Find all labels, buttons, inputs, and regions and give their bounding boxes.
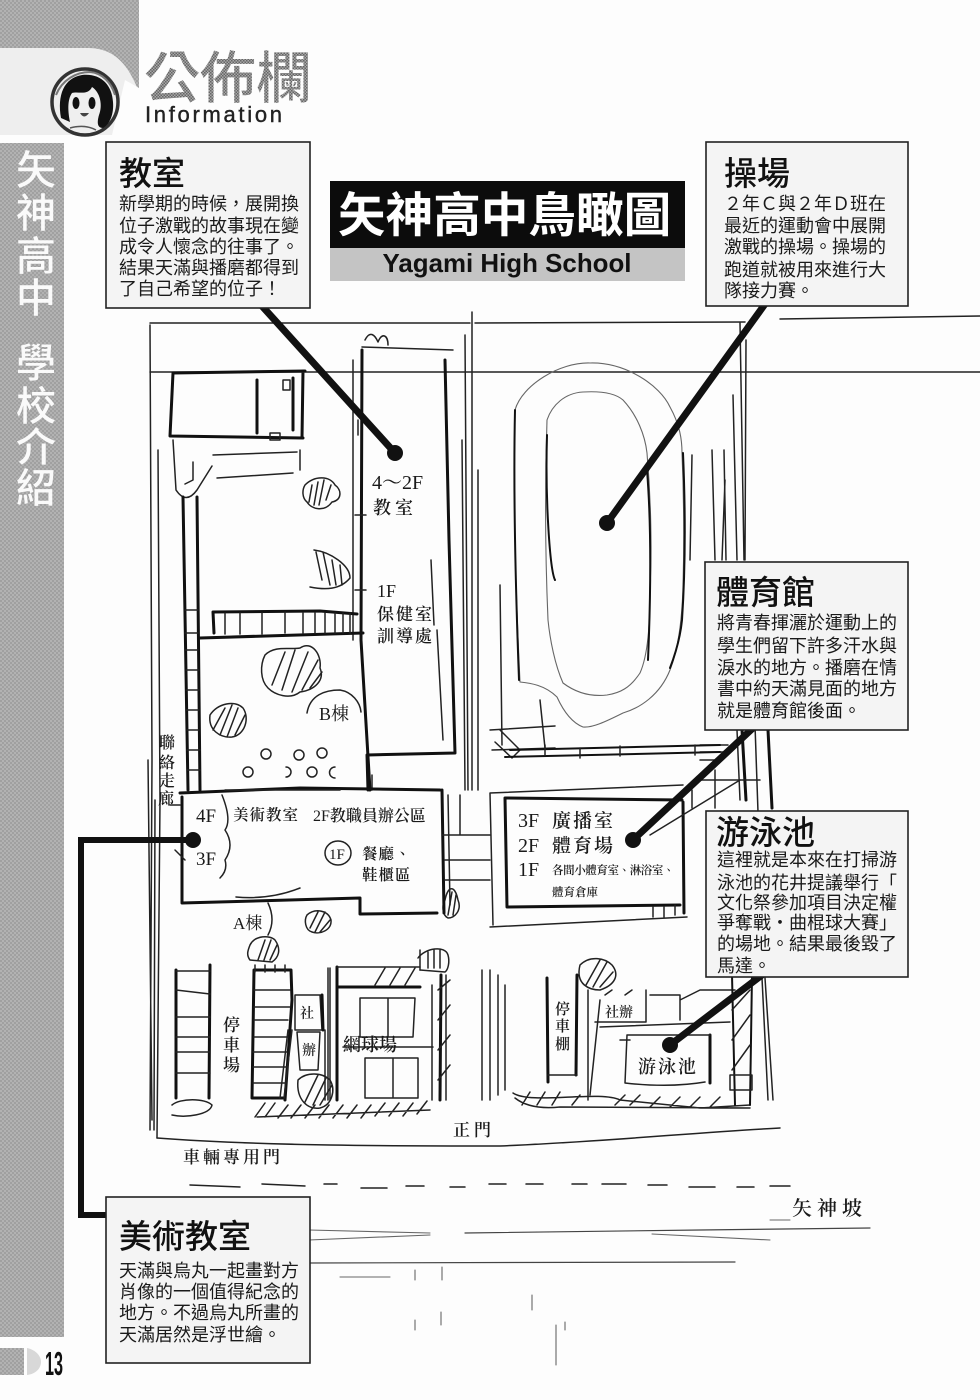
map labels: 2F xyxy=(518,835,539,857)
map labels: 3F xyxy=(518,810,539,832)
carport and pool xyxy=(547,975,752,1105)
leader lines xyxy=(81,304,765,1215)
panel: 美術教室: 天滿與烏丸一起畫對方 xyxy=(119,1257,299,1283)
leader: pool xyxy=(662,975,762,1053)
panel: 操場: 操場 xyxy=(724,155,790,192)
panel: 教室: 了自己希望的位子！ xyxy=(119,275,281,301)
sidebar vertical title: 紹 xyxy=(16,467,56,511)
corridor ladder xyxy=(183,497,200,790)
leader: gym xyxy=(625,728,753,848)
panel: 操場: 跑道就被用來進行大 xyxy=(724,256,886,282)
panel: 游泳池 xyxy=(706,811,908,978)
map labels: 場 xyxy=(223,1056,240,1075)
title block: 矢神高中鳥瞰圖 xyxy=(338,190,671,243)
site boundary lines xyxy=(148,312,980,1146)
panel: 體育館: 學生們留下許多汗水與 xyxy=(717,632,897,658)
sidebar vertical title: 神 xyxy=(16,192,56,236)
heading: 公佈欄 Information: Information xyxy=(145,102,282,127)
map labels: 廣播室 xyxy=(552,810,615,832)
sidebar band xyxy=(0,143,64,1337)
panel: 體育館: 淚水的地方。播磨在情 xyxy=(717,654,897,680)
title block: Yagami High School xyxy=(382,248,632,278)
map labels: 車 xyxy=(555,1017,570,1035)
tennis court xyxy=(330,950,450,1100)
map labels: 廊 xyxy=(158,790,174,808)
building B xyxy=(353,334,455,790)
sidebar vertical title: 中 xyxy=(16,277,56,321)
title block xyxy=(330,181,685,281)
panel: 美術教室: 肖像的一個值得紀念的 xyxy=(119,1278,299,1304)
map labels: 4～2F xyxy=(372,472,423,494)
panel: 教室: 位子激戰的故事現在變 xyxy=(119,212,299,238)
panel: 體育館: 體育館 xyxy=(716,574,815,611)
club rooms xyxy=(295,968,328,1100)
map labels: 各間小體育室、淋浴室、 xyxy=(552,863,674,877)
panel: 教室: 結果天滿與播磨都得到 xyxy=(119,254,299,280)
map labels: 棚 xyxy=(555,1035,570,1053)
service building xyxy=(170,371,305,498)
bottom hedges xyxy=(255,970,750,1118)
map labels: B棟 xyxy=(319,704,349,724)
map labels: 鞋櫃區 xyxy=(362,865,412,884)
panel: 美術教室: 地方。不過烏丸所畫的 xyxy=(119,1299,299,1325)
leader: classroom xyxy=(262,306,403,461)
sidebar vertical title: 介 xyxy=(16,426,56,470)
map labels xyxy=(158,472,698,1167)
map labels: 停 xyxy=(555,1000,570,1018)
map labels: A棟 xyxy=(233,914,262,933)
map labels: 訓導處 xyxy=(377,626,434,646)
building A outline xyxy=(170,788,490,935)
sidebar vertical title: 校 xyxy=(16,385,56,429)
map labels: 1F xyxy=(518,859,539,881)
panel: 體育館 xyxy=(705,562,908,730)
track xyxy=(490,363,725,758)
text: 13 xyxy=(45,1345,63,1382)
map labels: 保健室 xyxy=(377,605,434,624)
heading: 公佈欄 Information: 公佈欄 xyxy=(144,47,312,110)
page number tab xyxy=(0,1345,63,1382)
leader: art room xyxy=(81,832,201,1215)
road markings: 矢神坡 xyxy=(792,1197,867,1220)
map labels: 1F xyxy=(377,581,396,601)
panel: 操場: 激戰的操場。操場的 xyxy=(724,233,886,259)
road markings xyxy=(190,1184,870,1365)
leader: sports field xyxy=(599,304,765,531)
map labels: 走 xyxy=(159,772,175,790)
map labels: 網球場 xyxy=(343,1035,397,1055)
trees xyxy=(210,478,616,1108)
map labels: 停 xyxy=(223,1016,240,1035)
map labels: 餐廳、 xyxy=(362,844,412,863)
panel: 體育館: 將青春揮灑於運動上的 xyxy=(717,609,897,635)
panel: 教室 xyxy=(106,142,310,308)
map labels: 美術教室 xyxy=(233,806,299,824)
map labels: 體育倉庫 xyxy=(552,885,598,899)
map labels: 體育場 xyxy=(552,835,615,857)
panel: 美術教室: 天滿居然是浮世繪。 xyxy=(119,1321,281,1347)
panel: 操場: 隊接力賽。 xyxy=(724,277,814,303)
panel: 操場: ２年Ｃ與２年Ｄ班在 xyxy=(724,190,886,216)
panel: 教室: 新學期的時候，展開換 xyxy=(119,190,299,216)
panel: 游泳池: 泳池的花井提議舉行「 xyxy=(717,869,897,895)
panel: 操場: 最近的運動會中展開 xyxy=(724,212,886,238)
sidebar vertical title: 高 xyxy=(16,235,56,279)
panel: 游泳池: 馬達。 xyxy=(717,952,771,978)
panel: 美術教室: 美術教室 xyxy=(119,1218,251,1255)
panel: 教室: 成令人懷念的往事了。 xyxy=(119,233,299,259)
panel: 美術教室 xyxy=(106,1197,310,1363)
map labels: 車 xyxy=(223,1036,240,1055)
map labels: 絡 xyxy=(159,754,175,772)
sidebar vertical title: 矢 xyxy=(16,149,56,193)
panel: 游泳池: 這裡就是本來在打掃游 xyxy=(717,846,897,872)
map labels: 2F教職員辦公區 xyxy=(313,807,426,825)
map labels: 社辦 xyxy=(605,1004,633,1021)
map labels: 游泳池 xyxy=(638,1056,698,1077)
panel: 體育館: 就是體育館後面。 xyxy=(717,697,861,723)
map labels: 辦 xyxy=(302,1042,316,1059)
panel: 游泳池: 爭奪戰・曲棍球大賽」 xyxy=(717,909,897,935)
panel: 游泳池: 游泳池 xyxy=(716,814,815,851)
icon: girl portrait xyxy=(52,69,118,135)
map labels: 教室 xyxy=(373,498,417,518)
panel: 游泳池: 的場地。結果最後毀了 xyxy=(717,930,897,956)
gym outline xyxy=(490,780,740,927)
B-wing round planters xyxy=(243,748,335,778)
sidebar vertical title xyxy=(16,149,56,511)
parking rows xyxy=(172,965,292,1116)
map labels: 1F xyxy=(329,847,345,863)
header tab background xyxy=(0,0,139,135)
map labels: 4F xyxy=(196,806,216,827)
panel: 操場 xyxy=(706,142,908,306)
map labels: 3F xyxy=(196,849,216,870)
panel: 教室: 教室 xyxy=(119,155,185,192)
sidebar vertical title: 學 xyxy=(16,342,56,386)
map labels: 聯 xyxy=(159,733,176,752)
map labels: 社 xyxy=(300,1005,314,1022)
school map sketch xyxy=(148,312,980,1365)
panel: 游泳池: 文化祭參加項目決定權 xyxy=(717,889,897,915)
map labels: 正門 xyxy=(453,1121,495,1140)
map labels: 車輛專用門 xyxy=(183,1148,283,1167)
panel: 體育館: 書中約天滿見面的地方 xyxy=(717,675,897,701)
B-wing stairs xyxy=(200,611,363,713)
